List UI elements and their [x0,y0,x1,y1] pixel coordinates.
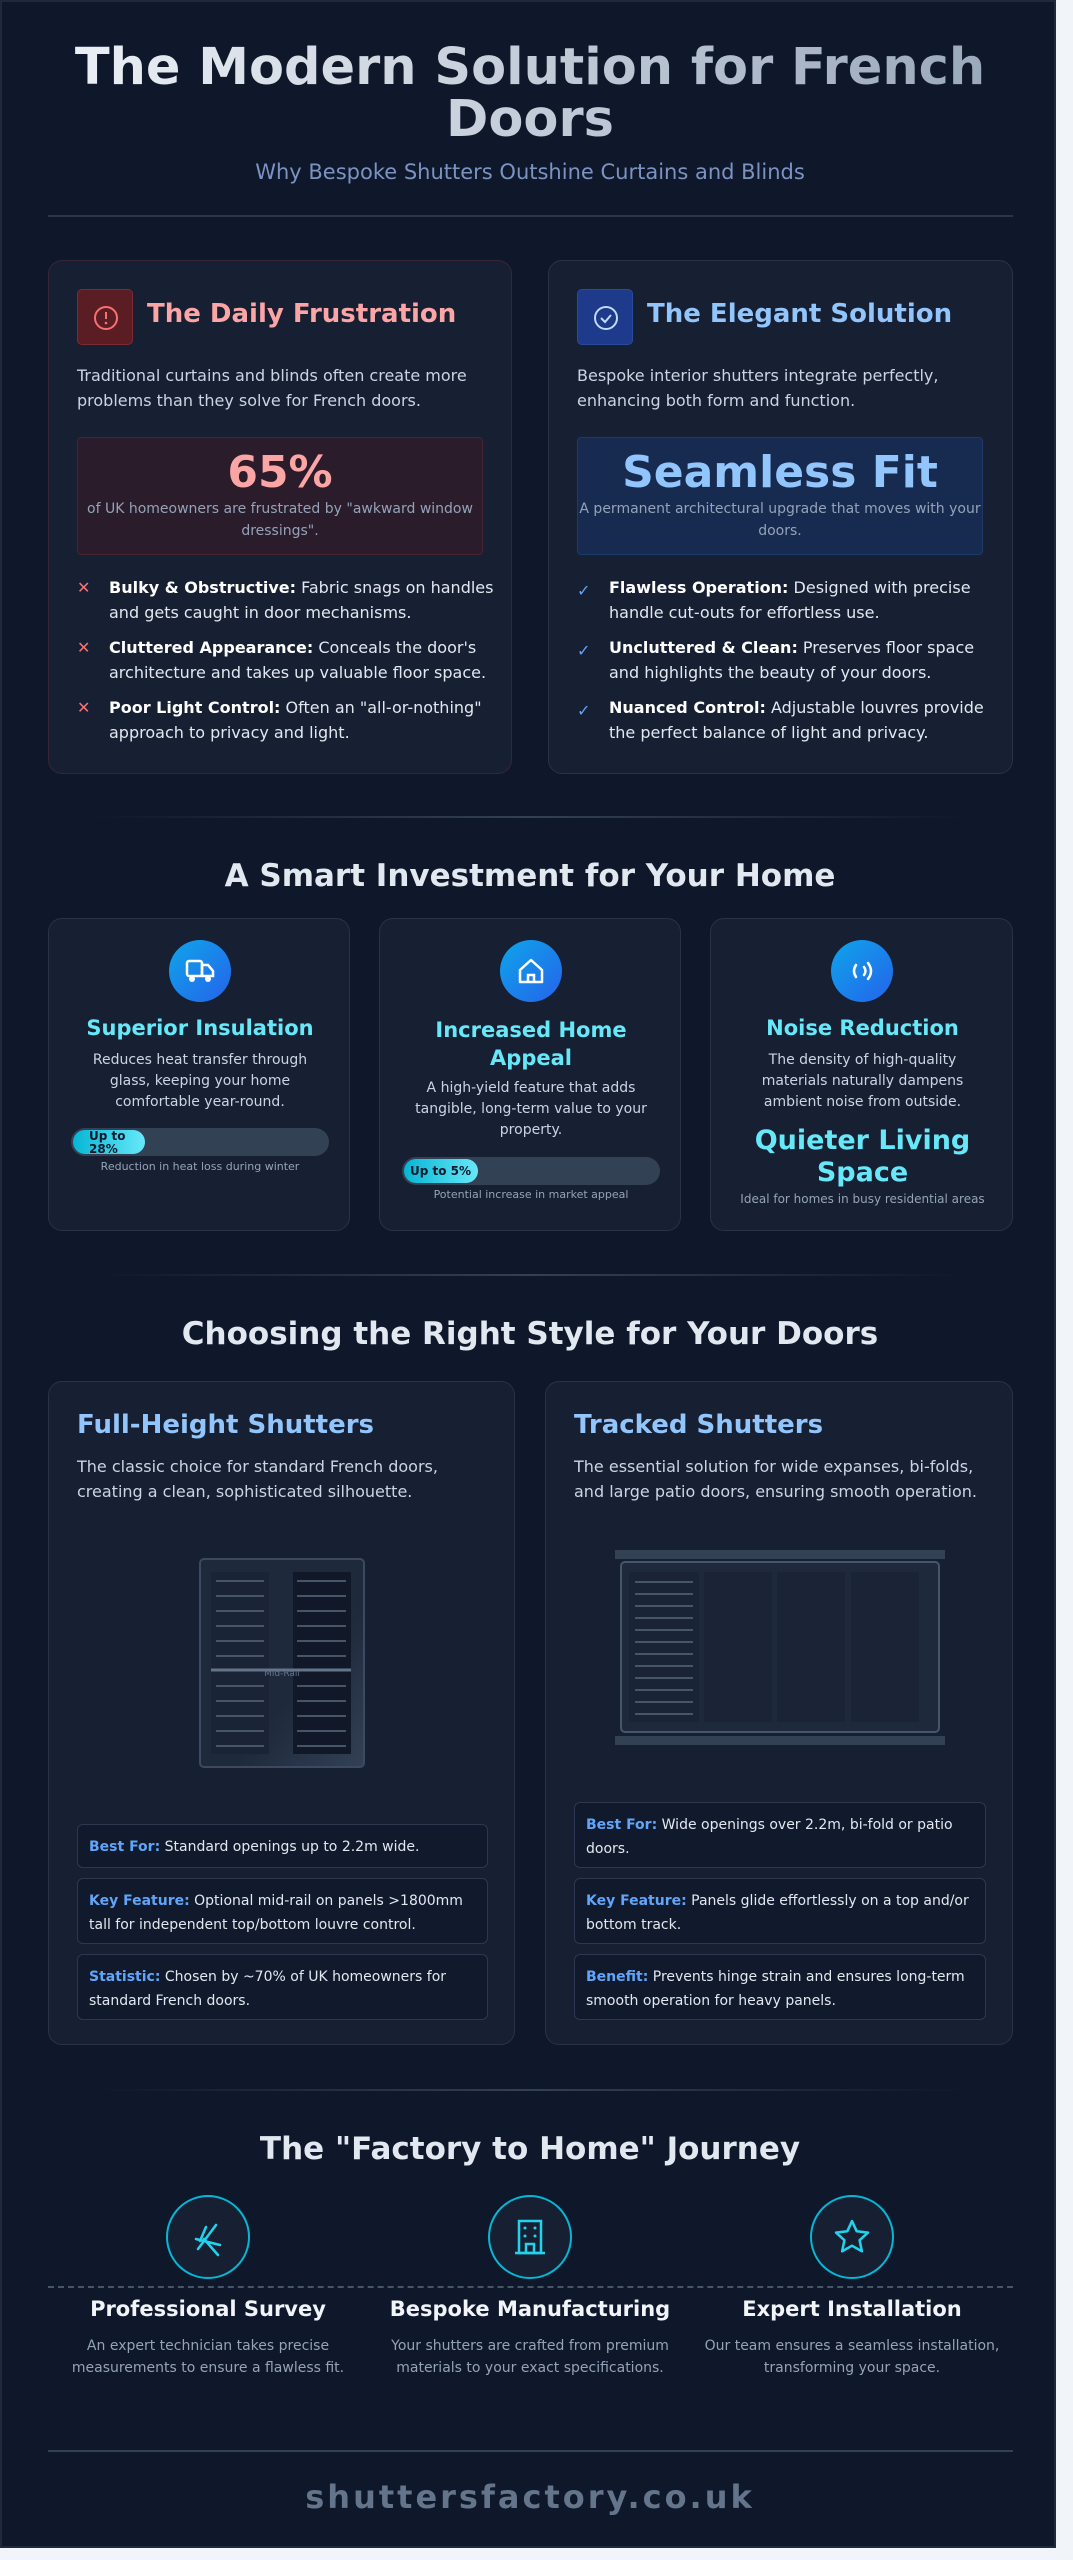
icon: building [488,2195,572,2279]
card: home appeal: Appeal [490,1046,572,1070]
list: Bulky & Obstructive: Fabric snags on handles and gets caught in door mechanisms. [109,578,493,622]
footer: shuttersfactory.co.uk [305,2478,755,2516]
heading: journey: The "Factory to Home" Journey [260,2131,800,2167]
card: insulation [48,918,350,1231]
card: home appeal: A high-yield feature that adds tangible, long-term value to your property. [415,1080,647,1138]
card: tracked: The essential solution for wide expanses, bi-folds, and large patio doors, ensuring smooth operation. [574,1457,977,1501]
progress bar [71,1128,329,1156]
step: survey: Professional Survey [90,2297,326,2321]
list: Uncluttered & Clean: Preserves floor space and highlights the beauty of your doors. [609,638,974,682]
card: tracked: Tracked Shutters [574,1410,823,1440]
icon: sound [831,940,893,1002]
heading: The Daily Frustration [147,299,456,329]
list [77,578,493,742]
stat: 65% [77,437,483,555]
card: insulation: Superior Insulation [86,1016,314,1040]
heading: choosing style: Choosing the Right Style for Your Doors [182,1316,878,1352]
card: noise: The density of high-quality materials naturally dampens ambient noise from outside. [762,1052,963,1110]
stat: 65%: 65% [227,447,333,498]
subtitle: Why Bespoke Shutters Outshine Curtains and Blinds [255,160,805,184]
icon: tools [166,2195,250,2279]
list: ✕ [77,578,90,597]
step: installation: Expert Installation [742,2297,962,2321]
title: Doors [446,90,614,149]
step: installation: Our team ensures a seamless installation, transforming your space. [705,2338,999,2376]
list: Nuanced Control: Adjustable louvres provide the perfect balance of light and privacy. [609,698,984,742]
card: full-height: Statistic: Chosen by ~70% of UK homeowners for standard French doors. [89,1969,446,2009]
stat: 65%: of UK homeowners are frustrated by "awkward window dressings". [87,501,473,539]
text: Traditional curtains and blinds often create more problems than they solve for French doors. [77,366,467,410]
card: home appeal: Potential increase in market appeal [434,1188,628,1201]
card: full-height: Full-Height Shutters [77,1410,374,1440]
heading: smart investment: A Smart Investment for Your Home [225,858,835,894]
list: ✕ [77,698,90,717]
card: full-height: Key Feature: Optional mid-rail on panels >1800mm tall for independent top/bottom louvre control. [89,1893,463,1933]
diagram: tracked shutter [615,1550,945,1745]
card: noise: Quieter Living [755,1125,970,1156]
card: full-height: The classic choice for standard French doors, creating a clean, sophisticated silhouette. [77,1457,438,1501]
card: tracked [545,1381,1013,2045]
stat: seamless fit: A permanent architectural upgrade that moves with your doors. [579,501,981,539]
card: tracked: Key Feature: Panels glide effortlessly on a top and/or bottom track. [586,1893,969,1933]
progress bar: Up to 28% [89,1129,126,1156]
list: ✕ [77,638,90,657]
card: noise: Noise Reduction [766,1016,959,1040]
card: full-height [48,1381,515,2045]
title: The Modern Solution for French [75,38,985,97]
card: noise [710,918,1013,1231]
list: ✓ [577,641,590,660]
info boxes: Best For: Wide openings over 2.2m, bi-fold or patio doors. [586,1817,953,1857]
card: home appeal: Increased Home [435,1018,627,1042]
heading: The Elegant Solution [647,299,952,329]
step: installation [705,2195,999,2376]
icon: check [577,289,633,345]
icon: star [810,2195,894,2279]
list: ✓ [577,701,590,720]
progress bar [402,1157,660,1185]
list: ✓ [577,581,590,600]
progress bar: Up to 5% [410,1164,471,1178]
diagram: full-height shutter [199,1558,365,1768]
step: survey [72,2195,344,2376]
step: manufacturing: Bespoke Manufacturing [390,2297,670,2321]
info boxes: Best For: Standard openings up to 2.2m wide. [89,1839,419,1855]
diagram: full-height shutter: Mid-Rail [264,1669,300,1679]
icon: house [500,940,562,1002]
list: Cluttered Appearance: Conceals the door's architecture and takes up valuable floor space. [109,638,486,682]
list: Flawless Operation: Designed with precise handle cut-outs for effortless use. [609,578,971,622]
step: survey: An expert technician takes precise measurements to ensure a flawless fit. [72,2338,344,2376]
list [577,578,984,742]
icon: alert [77,289,133,345]
card: noise: Space [817,1157,908,1188]
step: manufacturing [390,2195,670,2376]
card: tracked: Benefit: Prevents hinge strain and ensures long-term smooth operation for heavy panels. [586,1969,965,2009]
panel: daily frustration [48,260,512,774]
title [2,42,1058,146]
step: manufacturing: Your shutters are crafted from premium materials to your exact specifications. [391,2338,669,2376]
text: Bespoke interior shutters integrate perfectly, enhancing both form and function. [577,366,938,410]
card: insulation: Reduction in heat loss during winter [101,1160,299,1173]
card: noise: Ideal for homes in busy residential areas [740,1192,985,1206]
stat: seamless fit [577,437,983,555]
panel: elegant solution [548,260,1013,774]
stat: seamless fit: Seamless Fit [622,447,938,498]
icon: truck [169,940,231,1002]
info boxes [77,1824,488,1868]
list: Poor Light Control: Often an "all-or-nothing" approach to privacy and light. [109,698,482,742]
card: insulation: Reduces heat transfer through glass, keeping your home comfortable year-round. [93,1052,307,1110]
card: home appeal [379,918,681,1231]
info boxes [574,1802,986,1868]
